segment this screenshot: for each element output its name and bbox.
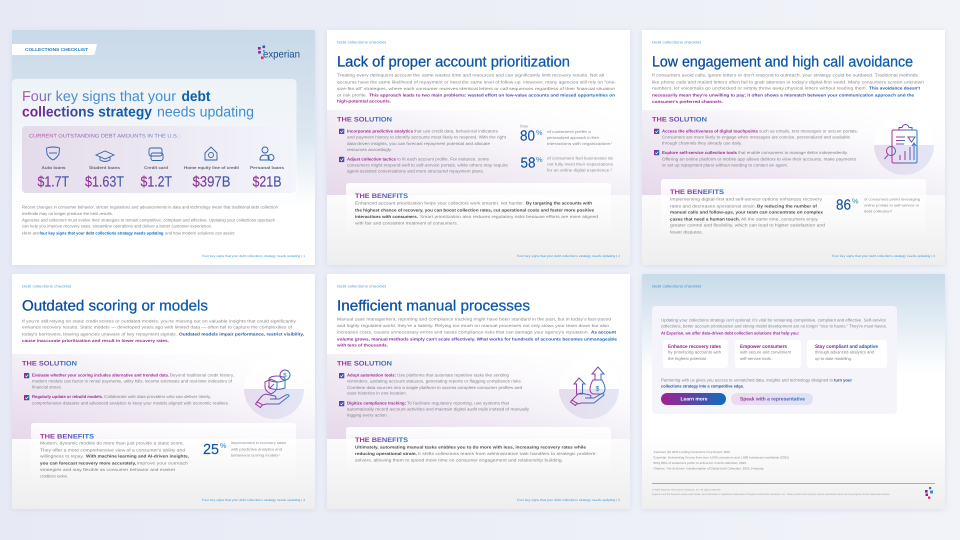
panel: the benefits: THE BENEFITS (355, 193, 409, 200)
panel: the benefits: greater control and flexibility, which can lead to higher satisfaction and (670, 223, 826, 228)
card: stay compliant and adaptive: Stay compliant and adaptive (815, 344, 878, 350)
panel: the benefits: rates and decreases operational strain. (670, 203, 756, 208)
panel: the benefits (346, 183, 611, 239)
heading: Inefficient manual processes (337, 299, 530, 315)
heading: the solution: THE SOLUTION (652, 116, 707, 123)
stat: 58%: % (536, 157, 542, 164)
intro text: If consumers avoid calls, ignore letters or don't respond to outreach, your strategy could be outdated. Traditional methods (652, 73, 918, 78)
panel: the benefits: cases that need a human touch. (670, 216, 740, 221)
stat: 86%: 86 (836, 197, 851, 213)
page footer: Four key signs that your debt collections strategy needs updating | 1 (202, 254, 305, 258)
tag: collections checklist: COLLECTIONS CHECKLIST (25, 47, 88, 52)
checklist item 1: financial stress. (32, 385, 62, 390)
icon: credit card (149, 148, 163, 160)
checklist item 1: and payment history to identify accounts most likely to respond. With the right (347, 135, 507, 140)
checklist item 2 (654, 150, 856, 168)
panel: the benefits: Implementing digital-first and self-service options enhances recovery (670, 197, 823, 202)
panel: the benefits: conditions evolve. (40, 473, 68, 478)
page 1: cover (12, 30, 315, 265)
title: collections strategy (22, 105, 152, 121)
intro text: like phone calls and mailed letters often fail to grab attention in today's digital-first world. Many consumers screen unknown (652, 79, 925, 84)
checklist item 1: such as emails, text messages or secure portals. (759, 128, 858, 133)
intro text: enhance recovery results. Static models — developed years ago with limited data — often fail to capture the complexities of (22, 325, 293, 330)
card: stay compliant and adaptive: through advanced analytics and (815, 350, 875, 355)
checklist item 1 (24, 372, 234, 390)
stat: 58%: 58 (520, 155, 536, 171)
intro text (336, 316, 618, 348)
panel: the benefits: with fair and consistent treatment of consumers. (355, 221, 458, 226)
legal text: Experian and the Experian marks used herein are trademarks or registered trademarks of Experian Information Solutions, Inc. Other product and company names mentioned herein are the property of their respective owners. (652, 493, 890, 496)
intro text (22, 205, 279, 236)
icon: hand with money bag and arrows (559, 359, 619, 419)
checklist item 2: agent-assisted conversations and more structured repayment plans. (347, 169, 484, 174)
title: debt (182, 89, 211, 105)
intro text: Recent changes in consumer behavior, stricter regulations and advancements in data and technology mean that traditional debt collection (22, 205, 279, 210)
stat: 80%: personalized approach in their (547, 135, 600, 140)
card: stay compliant and adaptive: up-to-date modeling. (815, 356, 852, 361)
checklist item 2 (339, 400, 530, 418)
stat: 80%: Over (520, 124, 529, 129)
intro text: size-fits-all" strategies, where each consumer receives identical letters or call sequences regardless of their financial situation (337, 86, 616, 91)
intro text: accounts have the same likelihood of repayment or need the same level of follow-up. However, many agencies still rely on "one- (337, 79, 617, 84)
checklist item 2: Explore self-service collection tools (662, 150, 738, 155)
auto loans figure: Auto loans (42, 165, 66, 170)
partnering text: turn your (834, 377, 852, 382)
checklist item 1: Evaluate whether your scoring includes alternative and trended data. (32, 372, 169, 377)
tag: collections checklist (12, 44, 97, 55)
student loans figure: $1.63T (85, 175, 124, 191)
checklist item 2: Digitize compliance tracking: (347, 400, 406, 405)
intro text: cause inaccurate prioritization and result in lower recovery rates. (22, 338, 169, 343)
panel: the benefits: fewer disputes. (670, 229, 703, 234)
intro text: increases costs, causes unnecessary errors and raises compliance risks that can damage your agency's reputation. (337, 330, 589, 335)
panel: the benefits: THE BENEFITS (355, 437, 409, 444)
intro text: Outdated models impair performance, restrict visibility, (179, 331, 304, 336)
checklist item 1: Access the effectiveness of digital touchpoints (662, 128, 759, 133)
footnotes: ⁴Gartner, The AI-Driven Transformation of Global Debt Collection, 2025, February. (653, 467, 764, 471)
logo mark (925, 487, 933, 499)
running header: Debt collections checklist (337, 284, 386, 288)
panel: conclusion (652, 306, 897, 414)
panel: the benefits: manual calls and follow-ups, your team can concentrate on complex (670, 210, 824, 215)
stat: 25%: behavioral scoring models⁴ (231, 454, 281, 458)
logo: experian (258, 46, 300, 60)
page footer: Four key signs that your debt collections strategy needs updating | 2 (517, 254, 620, 258)
intro text: Agencies and collectors must evolve their strategies to remain competitive, compliant and effective. Updating your collections approach (22, 218, 276, 222)
panel: debt amounts (22, 126, 296, 193)
conclusion text: Updating your collections strategy isn't optional; it's vital for remaining competitive, compliant and effective. Self-service (661, 317, 887, 322)
stat: 86%: debt collection³ (864, 210, 893, 214)
stat: 80% (520, 124, 613, 146)
icon: hand with coins and shield (244, 359, 304, 419)
panel: the benefits: reducing operational strain. (355, 451, 417, 456)
card: enhance recovery rates: the highest potential. (668, 356, 707, 361)
partnering text: Partnering with us gives you access to unmatched data, insights and technology designed to (661, 377, 834, 382)
running header: Debt collections checklist (22, 284, 71, 288)
stat: 25%: improvement in recovery rates (231, 441, 286, 445)
heading: Low engagement and high call avoidance (652, 55, 913, 71)
title: needs updating (157, 105, 254, 121)
stat: 86%: online portals to self-service in (864, 204, 919, 208)
card: enhance recovery rates (663, 340, 728, 368)
button: speak with a representative (731, 393, 813, 405)
intro text: numbers, let voicemails go unchecked or simply throw away physical letters without reading them. (652, 86, 867, 91)
page footer: Four key signs that your debt collections strategy needs updating | 4 (202, 498, 305, 502)
heading: Lack of proper account prioritization (337, 55, 570, 71)
checklist item 1: Combine data sources into a single platform to access complete consumer profiles and (347, 385, 523, 390)
heading: the solution: THE SOLUTION (22, 360, 77, 367)
intro text: As account (591, 330, 617, 335)
intro text (652, 73, 925, 104)
checklist item 2: automatically record account activities and maintain digital audit trails instead of manually (347, 406, 530, 411)
icon: clipboard with chart (874, 115, 934, 175)
checklist item 1: Use platforms that automate repetitive tasks like sending (397, 372, 510, 377)
checklist item 2: Adjust collection tactics (347, 157, 397, 162)
intro text (22, 318, 304, 343)
panel: the benefits: By reducing the number of (757, 203, 818, 208)
checklist item 1 (339, 372, 523, 396)
credit card figure: Credit card (144, 165, 169, 170)
personal loans figure (250, 165, 285, 191)
partnering text: collections strategy into a competitive edge. (661, 383, 744, 388)
running header: Debt collections checklist (337, 41, 386, 45)
panel: the benefits: By targeting the accounts with (526, 201, 593, 206)
stat: 25%: 25 (203, 442, 219, 458)
footnotes (653, 450, 789, 471)
checklist item 1: reminders, updating account statuses, generating reports or flagging compliance risks. (347, 379, 522, 384)
stat: 86%: % (852, 198, 858, 206)
checklist item 2: to fit each account profile. For instance, some (397, 157, 490, 162)
intro text: volume grows, manual methods simply can't scale effectively. What works for hundreds of accounts becomes unmanageable (337, 336, 618, 341)
checklist item 1 (654, 128, 858, 146)
card: enhance recovery rates: by prioritizing accounts with (668, 350, 722, 355)
intro text: four key signs that your debt collections strategy needs updating (40, 231, 164, 236)
intro text: or risk profile. (337, 93, 367, 98)
stat: 58%: of consumers feel businesses do (547, 156, 613, 161)
panel: the benefits: you can forecast recovery more accurately, (40, 460, 136, 465)
icon: student loans (96, 151, 114, 162)
footnotes: ³Why 86% of customers prefer to self-serve in debt collection, 2025. (653, 461, 747, 465)
checklist item 2 (24, 394, 229, 406)
conclusion text (661, 317, 887, 335)
stat: 58%: for an online digital experience.² (547, 168, 613, 173)
intro text: If you're still relying on static credit scores or outdated models, you're missing out on valuable insights that could significantly (22, 318, 297, 323)
button: learn more: Learn more (680, 397, 708, 403)
student loans figure: Student loans (89, 165, 121, 170)
checklist item 2: Collaborate with data providers who can deliver timely, (104, 394, 211, 399)
credit card figure (140, 165, 172, 191)
personal loans figure: $21B (252, 175, 282, 191)
page footer: Four key signs that your debt collections strategy needs updating | 5 (517, 498, 620, 502)
intro text: today's borrowers, leaving agencies unaware of key repayment signals. (22, 331, 177, 336)
page 4: outdated scoring (12, 274, 315, 509)
intro text (337, 73, 617, 104)
footnotes: ²Experian, Reinventing Survey from over 4,000 consumers and 1,800 businesses worldwide (2025) (653, 455, 789, 459)
home equity figure: $397B (192, 175, 231, 191)
page 2: account prioritization (327, 30, 630, 265)
stat: 58% (520, 155, 613, 173)
footnotes: ¹Experian, Q2 2025 Lending Consumers Crop Report, 2025. (653, 450, 731, 454)
button: speak with a representative: Speak with a representative (740, 397, 805, 403)
title (22, 89, 254, 121)
heading: Outdated scoring or models (22, 299, 208, 315)
checklist item 1: that use credit data, behavioral indicators (414, 128, 498, 133)
intro text: Treating every delinquent account the same wastes time and resources and can significantly limit recovery results. Not all (337, 73, 604, 78)
stat: 80%: % (536, 130, 542, 137)
panel: the benefits (31, 423, 296, 485)
running header: Debt collections checklist (652, 284, 701, 288)
checklist item 1: modern models can factor in rental payments, utility bills, income estimates and real-time indicators of (32, 379, 233, 384)
legal text (652, 488, 890, 496)
checklist item 1 (339, 128, 507, 152)
card: enhance recovery rates: Enhance recovery rates (668, 344, 721, 350)
panel: the benefits: solvers, allowing them to spend more time on consumer engagement and relationship building. (355, 458, 563, 463)
checklist item 1: resources accordingly. (347, 147, 392, 152)
conclusion text: At Experian, we offer data-driven debt collection solutions that help you: (661, 330, 799, 335)
panel: the benefits: They offer a more comprehensive view of a consumer's ability and (40, 447, 186, 452)
personal loans figure: Personal loans (250, 165, 285, 170)
checklist item 2: or set up repayment plans without needing to contact an agent. (662, 163, 788, 168)
stat: 25%: with predictive analytics and (231, 447, 282, 451)
card: stay compliant and adaptive (807, 340, 887, 368)
intro text: can help you improve recovery rates, streamline operations and deliver a better customer experience. (22, 224, 212, 228)
heading: the solution: THE SOLUTION (337, 360, 392, 367)
panel: the benefits: THE BENEFITS (670, 189, 725, 196)
icon: personal loans (260, 147, 274, 160)
stat: 80%: interactions with organizations¹ (547, 141, 613, 146)
intro text: with tens of thousands. (336, 343, 388, 348)
panel: the benefits: strategies and stay flexible as consumer behavior and market (40, 467, 176, 472)
panel: the benefits: THE BENEFITS (40, 433, 95, 440)
panel: the benefits: All the same time, consumers enjoy (741, 216, 819, 221)
checklist item 2: consumers might respond well to self-service portals, while others may require (347, 163, 509, 168)
title: Four key signs that your (22, 89, 176, 105)
conclusion text: collections, better account prioritization and strong model development are no longer "nice to haves." They're must-haves. (661, 323, 887, 328)
intro text: methods may no longer produce the best results. (22, 211, 113, 216)
icon: hand with money bag and arrows: $ (596, 385, 600, 393)
logo: experian: experian (263, 48, 300, 60)
checklist item 2: To facilitate regulatory reporting, use systems that (407, 400, 510, 405)
checklist item 2: logging every action. (347, 413, 388, 418)
stat: 25% (203, 441, 286, 458)
checklist item 1: Consumers are more likely to engage when messages are concise, personalized and available (662, 135, 851, 140)
card: empower consumers (735, 340, 801, 368)
panel: the benefits: interactions with consumers. (355, 214, 418, 219)
home equity figure (184, 165, 240, 191)
panel: debt amounts: CURRENT OUTSTANDING DEBT AMOUNTS IN THE U.S.: (29, 134, 180, 140)
page 3: low engagement (642, 30, 945, 265)
partnering text (661, 377, 852, 388)
stat: 25%: % (220, 443, 226, 450)
panel: the benefits (346, 427, 611, 475)
panel: the benefits: improve your outreach (137, 460, 189, 465)
panel: the benefits: Enhanced account prioritization helps your collectors work smarter, not harder. (355, 201, 524, 206)
panel: the benefits: the highest chance of recovery, you can boost collection rates, cut operational costs and foster more positive (355, 207, 595, 212)
student loans figure (85, 165, 124, 191)
stat: 80%: 80 (520, 129, 535, 145)
intro text: This approach leads to two main problems: wasted effort on low-value accounts and missed opportunities on (369, 93, 616, 98)
checklist item 2 (339, 157, 509, 174)
intro text: This avoidance doesn't (869, 86, 921, 91)
panel: the benefits (661, 179, 926, 241)
panel: the benefits: Smart prioritization also reduces regulatory risks because efforts are more aligned (420, 214, 599, 219)
intro text: and highly regulated world, they're a liability. Relying too much on manual processes not only slows your team down but also (337, 323, 610, 328)
intro text: consumer's preferred channels. (652, 99, 723, 104)
checklist item 1: data-driven insights, you can forecast repayment potential and allocate (347, 141, 491, 146)
checklist item 1: case histories in one location. (347, 391, 407, 396)
checklist item 2: comprehensive datasets and advanced analytics to keep your models aligned with economic realities. (32, 401, 229, 406)
icon: home equity (205, 147, 217, 160)
home equity figure: Home equity line of credit (184, 165, 240, 170)
intro text: Here are (22, 231, 40, 236)
intro text: and how modern solutions can assist: (165, 231, 235, 236)
checklist item 1: Beyond traditional credit history, (170, 372, 234, 377)
page 5: manual processes (327, 274, 630, 509)
stat: 86% (836, 197, 920, 214)
panel: the benefits: With machine learning and AI-driven insights, (86, 454, 189, 459)
card: empower consumers: with secure and convenient (740, 350, 792, 355)
checklist item 1: Incorporate predictive analytics (347, 128, 414, 133)
legal text: © 2025 Experian Information Solutions, Inc. All rights reserved. (652, 488, 721, 492)
stat: 86%: of consumers prefer leveraging (864, 198, 920, 202)
running header: Debt collections checklist (652, 41, 701, 45)
credit card figure: $1.2T (140, 175, 172, 191)
panel: title and debt amounts (12, 79, 296, 200)
checklist item 2: Regularly update or rebuild models. (32, 394, 103, 399)
checklist item 2: that enable consumers to manage debts independently. (738, 150, 848, 155)
stat: 58%: not fully meet their expectations (547, 162, 613, 167)
card: empower consumers: self-service tools. (740, 356, 772, 361)
intro text: necessarily mean they're unwilling to pay; it often shows a mismatch between your communication approach and the (652, 92, 915, 97)
icon: hand with coins and shield: $ (283, 372, 287, 379)
button: learn more (661, 393, 726, 405)
panel: the benefits: Modern, dynamic models do more than just provide a static score. (40, 441, 184, 446)
checklist item 1: Adopt automation tools: (347, 372, 396, 377)
panel: the benefits: Ultimately, automating manual tasks enables you to do more with less, increasing recovery rates while (355, 444, 587, 449)
intro text: Manual case management, reporting and compliance tracking might have been standard in the past, but in today's fast-paced (337, 316, 612, 321)
checklist item 1: through channels they already use daily. (662, 141, 742, 146)
page footer: Four key signs that your debt collections strategy needs updating | 3 (832, 254, 935, 258)
auto loans figure: $1.7T (38, 175, 69, 191)
checklist item 2: Offering an online platform or mobile app allows debtors to view their accounts, make payments (662, 157, 856, 162)
page 6: conclusion (642, 274, 945, 509)
icon: auto loans (46, 147, 60, 160)
panel: the benefits: It shifts collections teams from administrative task handlers to strategic problem- (418, 451, 598, 456)
card: empower consumers: Empower consumers (740, 344, 787, 350)
heading: the solution: THE SOLUTION (337, 116, 392, 123)
stat: 80%: of customers prefer a (547, 129, 592, 134)
auto loans figure (38, 165, 69, 191)
intro text: high-potential accounts. (337, 99, 391, 104)
panel: the benefits: willingness to repay. (40, 454, 84, 459)
